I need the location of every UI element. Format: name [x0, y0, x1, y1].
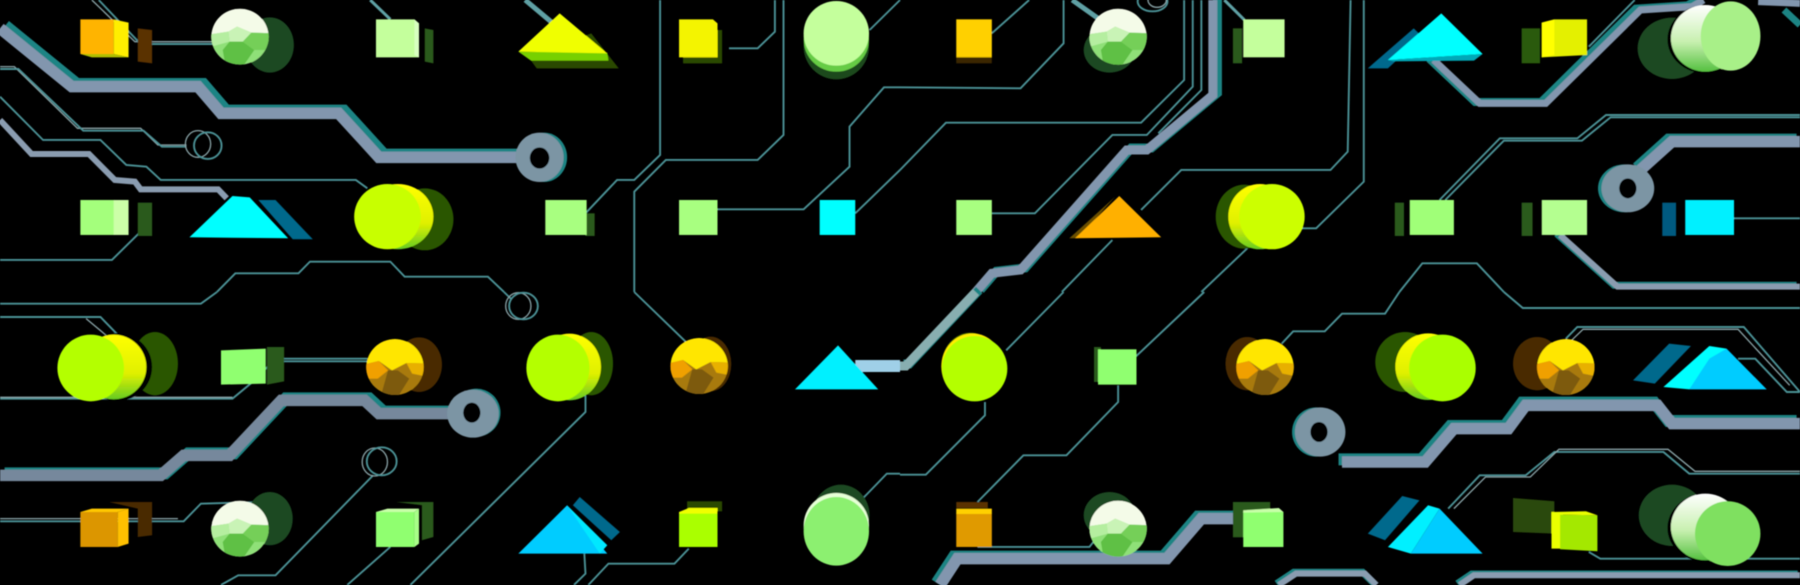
orange cube	[80, 502, 152, 547]
green sphere	[1084, 492, 1153, 559]
thin circuit traces	[900, 292, 1800, 559]
cyan triangle	[189, 196, 313, 239]
green cube	[221, 347, 284, 385]
green disc	[804, 485, 870, 566]
small rings	[362, 293, 538, 476]
lime cylinder	[1375, 332, 1476, 401]
lower right thick trace	[1557, 234, 1800, 287]
light green cube	[376, 19, 433, 63]
green sphere	[205, 492, 293, 559]
orange square	[956, 19, 992, 63]
bottom-left quadrant	[0, 292, 900, 585]
lower thick traces	[937, 517, 1800, 585]
v-shaped thick trace	[1429, 0, 1800, 103]
green square	[1094, 347, 1136, 385]
gold sphere	[1225, 337, 1300, 397]
gold sphere	[1513, 337, 1600, 397]
lime disc	[354, 184, 453, 250]
thin circuit traces	[900, 0, 1800, 292]
gold sphere	[665, 337, 734, 396]
thick diagonal trace	[900, 290, 979, 366]
large cylinder	[1639, 485, 1760, 566]
orange triangle	[1069, 196, 1161, 238]
thick trace with ring	[1598, 140, 1800, 212]
green squares and cyan square	[545, 200, 855, 236]
thick trace with ring	[1292, 403, 1800, 462]
lime cylinder	[57, 332, 178, 401]
gold sphere	[360, 337, 442, 397]
large cylinder	[1638, 1, 1760, 79]
light green disc	[804, 1, 869, 79]
green sphere	[1084, 9, 1153, 73]
thick diagonal trace	[976, 0, 1217, 292]
thin circuit traces	[0, 0, 900, 292]
thick pale trace from cyan triangle	[855, 360, 900, 372]
cyan triangle	[795, 345, 878, 389]
lime disc	[1216, 184, 1305, 249]
thick trace with ring	[0, 26, 567, 182]
green cube	[1233, 502, 1283, 547]
cyan prism	[1368, 496, 1483, 554]
small ring at top	[1138, 0, 1167, 11]
yellow triangle	[518, 13, 619, 68]
light green cube	[1233, 19, 1285, 63]
green cube	[376, 502, 433, 547]
yellow-green cube	[1513, 498, 1597, 551]
cyan triangle	[1368, 13, 1483, 68]
bottom-right quadrant	[900, 290, 1800, 585]
thick trace with ring	[0, 389, 501, 475]
green squares and cyan square	[956, 200, 1734, 236]
cyan triangle	[518, 497, 620, 554]
top-left quadrant	[0, 0, 900, 292]
orange cube	[80, 19, 152, 63]
yellow cube	[1522, 19, 1587, 63]
lime disc	[526, 332, 613, 401]
small ring	[185, 131, 222, 159]
lime disc	[941, 333, 1007, 401]
top-right quadrant	[900, 0, 1800, 292]
green sphere	[205, 9, 294, 73]
cyan prism	[1633, 344, 1767, 389]
lime cube	[679, 501, 722, 547]
orange cube	[956, 502, 992, 547]
thin circuit traces	[0, 292, 900, 585]
yellow cube	[679, 19, 722, 63]
green cube row two	[80, 200, 152, 236]
